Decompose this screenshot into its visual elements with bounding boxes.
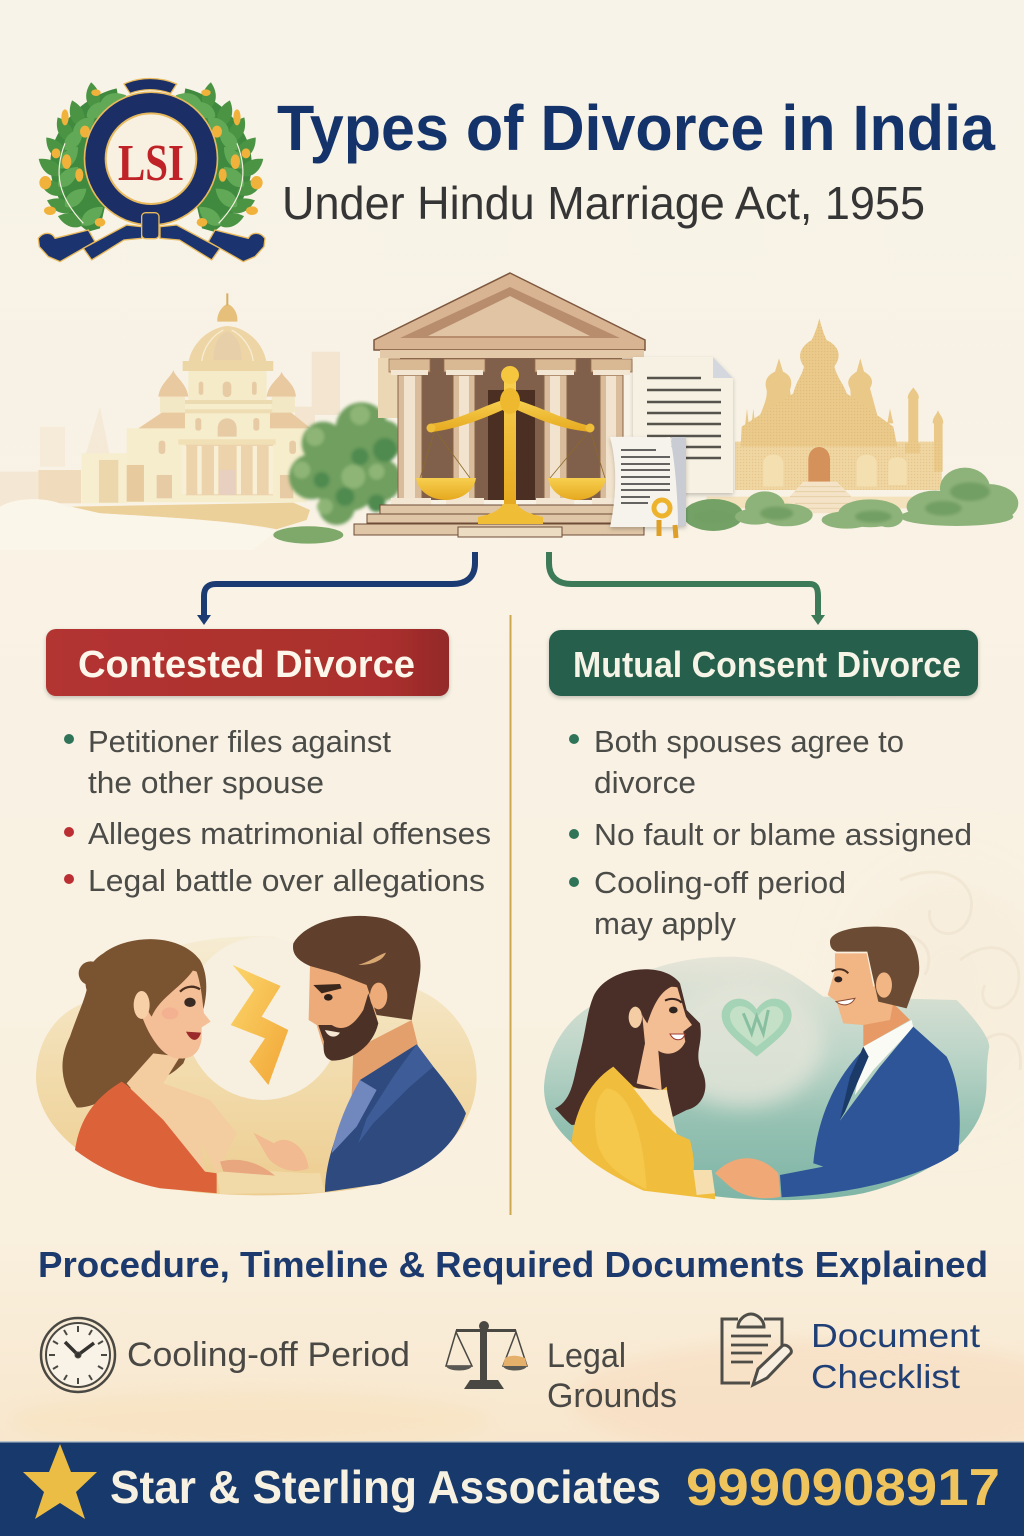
feature: legal grounds: Legal xyxy=(547,1337,626,1375)
illustration: agreeing couple xyxy=(544,927,989,1200)
heart xyxy=(722,999,792,1057)
woman xyxy=(62,939,237,1193)
feature: document checklist: Document xyxy=(811,1317,980,1354)
bullet list: mutual: No fault or blame assigned xyxy=(594,817,972,852)
heading: contested divorce xyxy=(46,629,449,696)
illustration: arguing couple xyxy=(36,916,477,1195)
bullet list: mutual: divorce xyxy=(594,765,696,800)
feature: document checklist: Checklist xyxy=(811,1358,960,1395)
footer bar xyxy=(0,1441,1024,1536)
clasped hands xyxy=(715,1158,781,1198)
heading: contested divorce: Contested Divorce xyxy=(78,644,415,686)
tree left xyxy=(273,402,403,544)
heading: mutual consent: Mutual Consent Divorce xyxy=(573,644,961,685)
bushes right xyxy=(683,468,1018,531)
icon: clipboard and pencil xyxy=(722,1314,791,1385)
large document xyxy=(633,357,733,493)
cream fabric and hands xyxy=(217,1133,325,1194)
feature: cooling-off period: Cooling-off Period xyxy=(127,1336,410,1374)
lightning bolt xyxy=(231,965,288,1085)
feature: document checklist xyxy=(722,1314,980,1395)
heading: mutual consent xyxy=(549,630,978,696)
panel: mutual consent divorce xyxy=(544,630,989,1200)
illustration: temple skyline xyxy=(683,318,1018,531)
laurel wreath xyxy=(35,81,267,232)
bullet list: mutual: may apply xyxy=(594,906,736,941)
phone number: 9990908917 xyxy=(686,1459,1000,1517)
logo: LSI laurel emblem xyxy=(35,78,267,262)
columns xyxy=(398,375,623,499)
column divider xyxy=(510,615,512,1215)
icon: clock xyxy=(41,1318,115,1392)
illustration: courthouse xyxy=(354,273,645,537)
connector: to contested divorce xyxy=(197,552,475,625)
ring xyxy=(84,91,218,226)
bullet list: mutual: Cooling-off period xyxy=(594,865,846,900)
subtitle: Under Hindu Marriage Act, 1955 xyxy=(282,177,925,229)
seal xyxy=(654,500,676,538)
feature: legal grounds: Grounds xyxy=(547,1377,677,1415)
bullet list: contested: Petitioner files against xyxy=(88,724,391,759)
bullet list: contested: Legal battle over allegations xyxy=(88,863,485,898)
small certificate xyxy=(610,437,686,527)
illustration: palace skyline xyxy=(0,293,403,550)
connector: to mutual consent divorce xyxy=(549,552,825,625)
LSI monogram: LSI xyxy=(118,135,184,192)
icon: scales xyxy=(446,1321,527,1389)
feature: legal grounds xyxy=(446,1321,677,1415)
section heading: procedure: Procedure, Timeline & Required Documents Explained xyxy=(38,1244,988,1285)
ribbon xyxy=(38,213,265,262)
bullet list: contested: Alleges matrimonial offenses xyxy=(88,816,491,851)
crown tab xyxy=(124,78,177,93)
man xyxy=(780,927,960,1197)
panel: contested divorce xyxy=(36,629,491,1195)
woman xyxy=(555,969,715,1199)
icon: star xyxy=(23,1444,97,1519)
firm name: Star & Sterling Associates xyxy=(110,1461,661,1513)
bullet list: contested xyxy=(64,724,491,898)
illustration: golden scales xyxy=(416,366,606,524)
pediment xyxy=(374,273,645,350)
man xyxy=(293,916,466,1192)
bullet list: mutual: Both spouses agree to xyxy=(594,724,904,759)
steps xyxy=(354,505,644,537)
illustration: legal documents xyxy=(610,357,733,538)
title: Types of Divorce in India xyxy=(277,92,995,164)
bullet list: contested: the other spouse xyxy=(88,765,324,800)
bullet list: mutual xyxy=(569,724,972,941)
feature: cooling-off period xyxy=(41,1318,410,1392)
